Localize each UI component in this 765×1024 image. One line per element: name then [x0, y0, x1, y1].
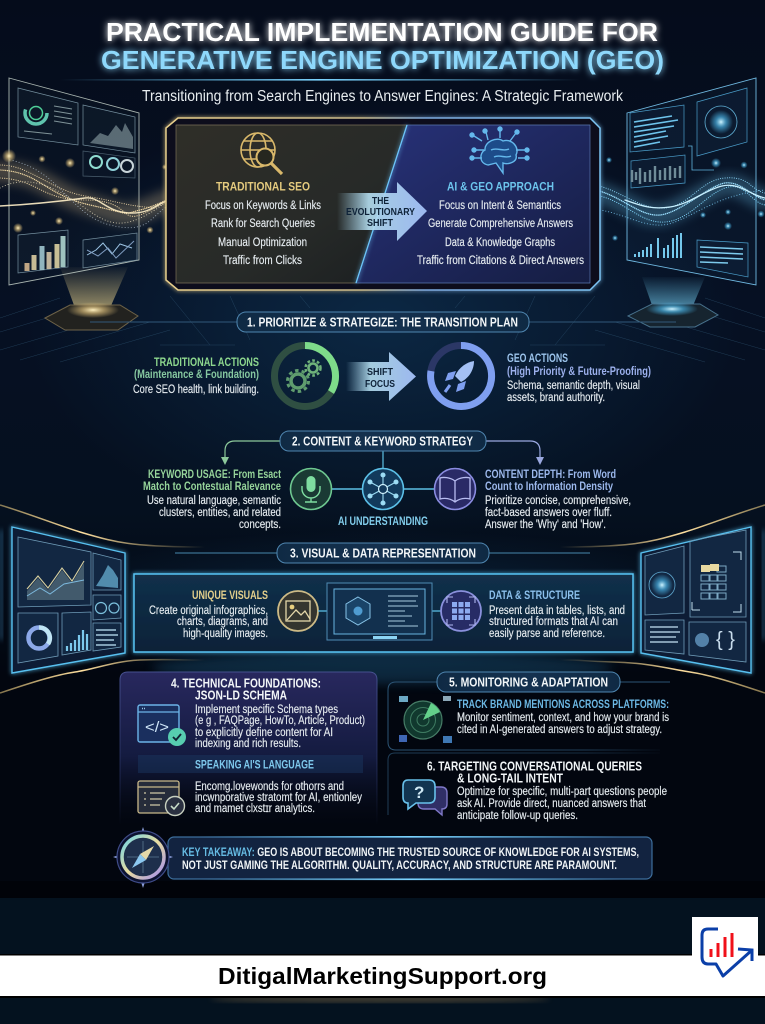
text: brand mentions: Monitor sentiment, context, and how your brand is [457, 712, 669, 724]
icon: checklist window [138, 781, 184, 816]
text: brand mentions: cited in AI-generated answers to adjust strategy. [457, 724, 662, 736]
text: keyword usage [143, 467, 281, 531]
panel: key takeaway [168, 836, 652, 880]
icon: brain network [470, 127, 529, 173]
list: AI & GEO [417, 200, 584, 267]
label: AI understanding: AI UNDERSTANDING [338, 514, 428, 528]
icon: image [278, 591, 318, 631]
text: traditional actions: TRADITIONAL ACTIONS [154, 355, 259, 369]
text: content depth: Prioritize concise, comprehensive, [485, 495, 631, 507]
text: content depth: Count to Information Density [485, 479, 613, 493]
text: content depth: Answer the 'Why' and 'How'. [485, 519, 606, 531]
right hologram display [627, 78, 756, 308]
text: language [195, 781, 362, 815]
title [101, 17, 664, 75]
panel: key takeaway: NOT JUST GAMING THE ALGORITHM. QUALITY, ACCURACY, AND STRUCTURE ARE PARAMOUNT. [182, 860, 617, 872]
right data wall [641, 527, 751, 673]
footer background [0, 898, 765, 1024]
text: keyword usage: Use natural language, semantic [147, 495, 281, 507]
title: PRACTICAL IMPLEMENTATION GUIDE FOR [106, 17, 658, 47]
text: keyword usage: Match to Contestual Ralevance [143, 479, 281, 493]
icon: rocket ring [430, 345, 492, 406]
text: schema: Implement specific Schema types [195, 704, 338, 716]
icon: network hub [362, 468, 404, 510]
icon: question bubbles [403, 780, 447, 815]
heading: section 6: 6. TARGETING CONVERSATIONAL QUERIES [427, 760, 642, 774]
icon: code window [138, 705, 186, 746]
list: AI & GEO: Traffic from Citations & Direct Answers [417, 255, 584, 267]
panel: monitoring and adaptation [388, 672, 670, 750]
footer band: DitigalMarketingSupport.org [218, 963, 547, 989]
text: language: and mamet clxstɪr analytics. [195, 803, 315, 815]
right hologram base [628, 302, 718, 327]
text: data and structure: DATA & STRUCTURE [489, 588, 580, 602]
text: traditional actions: (Maintenance & Foundation) [134, 367, 259, 381]
subtitle: Transitioning from Search Engines to Answer Engines: A Strategic Framework [142, 88, 623, 105]
arrow: the evolutionary shift: THE [372, 195, 389, 207]
text: data and structure: Present data in tables, lists, and [489, 605, 625, 617]
text: content depth: CONTENT DEPTH: From Word [485, 467, 616, 481]
arrow: the evolutionary shift [337, 182, 427, 241]
gold accent curves [0, 505, 765, 693]
text: schema: (e g , FAQPage, HowTo, Article, Product) [195, 715, 365, 727]
list: traditional SEO [205, 200, 321, 267]
icon: question bubbles: ? [414, 783, 424, 802]
text: keyword usage: clusters, entities, and related [159, 507, 281, 519]
text: GEO actions: GEO ACTIONS [507, 351, 568, 365]
list: AI & GEO: Generate Comprehensive Answers [428, 218, 573, 230]
heading: section 2: 2. CONTENT & KEYWORD STRATEGY [292, 434, 474, 448]
list: traditional SEO: Rank for Search Queries [211, 218, 315, 230]
icon: radar [399, 696, 452, 743]
text: queries: anticipate follow-up queries. [457, 810, 578, 822]
heading: section 6: & LONG-TAIL INTENT [457, 772, 563, 786]
icon: globe with magnifier [241, 133, 282, 174]
title: GENERATIVE ENGINE OPTIMIZATION (GEO) [101, 45, 664, 75]
text: keyword usage: KEYWORD USAGE: From Esact [148, 467, 281, 481]
text: schema: to explicitly define content for AI [195, 727, 333, 739]
right particle wave [595, 157, 765, 241]
arrow: shift focus: SHIFT [367, 366, 393, 378]
heading: speaking AI's language: SPEAKING AI'S LANGUAGE [195, 758, 314, 772]
text: language: incwnporative stratomt for AI, entionley [195, 792, 362, 804]
heading: section 4: 4. TECHNICAL FOUNDATIONS: [171, 676, 321, 690]
arrow: shift focus: FOCUS [365, 378, 395, 390]
text: traditional actions: Core SEO health, link building. [133, 384, 259, 396]
panel: visual and data [134, 574, 633, 652]
icon: open book [434, 468, 476, 510]
text: schema: indexing and rich results. [195, 738, 301, 750]
text: unique visuals: charts, diagrams, and [177, 616, 268, 628]
icon: data grid [441, 591, 481, 631]
text: GEO actions [507, 351, 651, 404]
heading: section 3 [175, 543, 590, 563]
icon: microphone [290, 468, 332, 510]
text: content depth: fact-based answers over fluff. [485, 507, 612, 519]
left data wall [12, 527, 125, 673]
heading: traditional SEO: TRADITIONAL SEO [216, 180, 310, 194]
footer glow [210, 996, 550, 1002]
arrow: the evolutionary shift: SHIFT [367, 217, 393, 229]
list: AI & GEO: Focus on Intent & Semantics [439, 200, 561, 212]
heading: section 5: 5. MONITORING & ADAPTATION [449, 676, 608, 690]
text: data and structure: structured formats that AI can [489, 616, 618, 628]
panel: SEO vs GEO comparison [166, 118, 600, 290]
heading: section 4 [171, 676, 321, 702]
text: queries [457, 786, 667, 822]
left particle wave [0, 149, 175, 234]
text: brand mentions [457, 697, 669, 736]
dark band [0, 881, 765, 898]
icon: code window: </> [145, 719, 169, 736]
left hologram base [45, 302, 138, 330]
text: queries: ask AI. Provide direct, nuanced answers that [457, 798, 647, 810]
text: content depth [485, 467, 631, 531]
icon: gears ring [274, 346, 336, 406]
icon: compass [113, 827, 173, 888]
heading: section 3: 3. VISUAL & DATA REPRESENTATION [290, 546, 476, 560]
list: traditional SEO: Focus on Keywords & Links [205, 200, 321, 212]
heading: section 1: 1. PRIORITIZE & STRATEGIZE: THE TRANSITION PLAN [247, 316, 518, 330]
heading: section 5 [437, 672, 620, 692]
text: data and structure: easily parse and reference. [489, 628, 605, 640]
text: queries: Optimize for specific, multi-part questions people [457, 786, 667, 798]
heading: speaking AI's language [138, 755, 363, 773]
heading: section 6 [427, 760, 642, 786]
text: unique visuals: UNIQUE VISUALS [192, 588, 268, 602]
heading: section 1 [90, 312, 676, 332]
list: AI & GEO: Data & Knowledge Graphs [445, 237, 555, 249]
text: language: Encomg.lovewonds for othorrs and [195, 781, 344, 793]
heading: section 4: JSON-LD SCHEMA [195, 688, 287, 702]
diagram: AI understanding [290, 468, 476, 528]
text: unique visuals [149, 588, 268, 640]
list: traditional SEO: Manual Optimization [218, 237, 307, 249]
heading: section 2 [221, 431, 544, 468]
list: traditional SEO: Traffic from Clicks [223, 255, 302, 267]
text: GEO actions: assets, brand authority. [507, 392, 605, 404]
logo [692, 917, 758, 976]
text: unique visuals: high-quality images. [183, 628, 268, 640]
arrow: shift focus [346, 352, 416, 401]
panel: key takeaway: KEY TAKEAWAY: GEO IS ABOUT BECOMING THE TRUSTED SOURCE OF KNOWLEDGE FOR AI SYSTEMS, [182, 847, 639, 859]
text: unique visuals: Create original infographics, [149, 605, 268, 617]
icon: screen device [327, 583, 432, 640]
footer band [0, 954, 765, 998]
arrow: the evolutionary shift: EVOLUTIONARY [346, 206, 415, 218]
text: traditional actions [133, 355, 259, 396]
text: brand mentions: TRACK BRAND MENTIONS ACROSS PLATFORMS: [457, 697, 669, 711]
left hologram display [9, 78, 139, 308]
text: GEO actions: (High Priority & Future-Proofing) [507, 364, 651, 378]
panel: technical foundations [120, 672, 377, 825]
text: schema [195, 704, 365, 750]
right data wall: { } [716, 629, 735, 651]
panel: conversational queries [388, 753, 667, 822]
heading: AI & GEO approach: AI & GEO APPROACH [447, 180, 554, 194]
text: data and structure [489, 588, 625, 640]
text: GEO actions: Schema, semantic depth, visual [507, 380, 640, 392]
text: keyword usage: concepts. [239, 519, 281, 531]
